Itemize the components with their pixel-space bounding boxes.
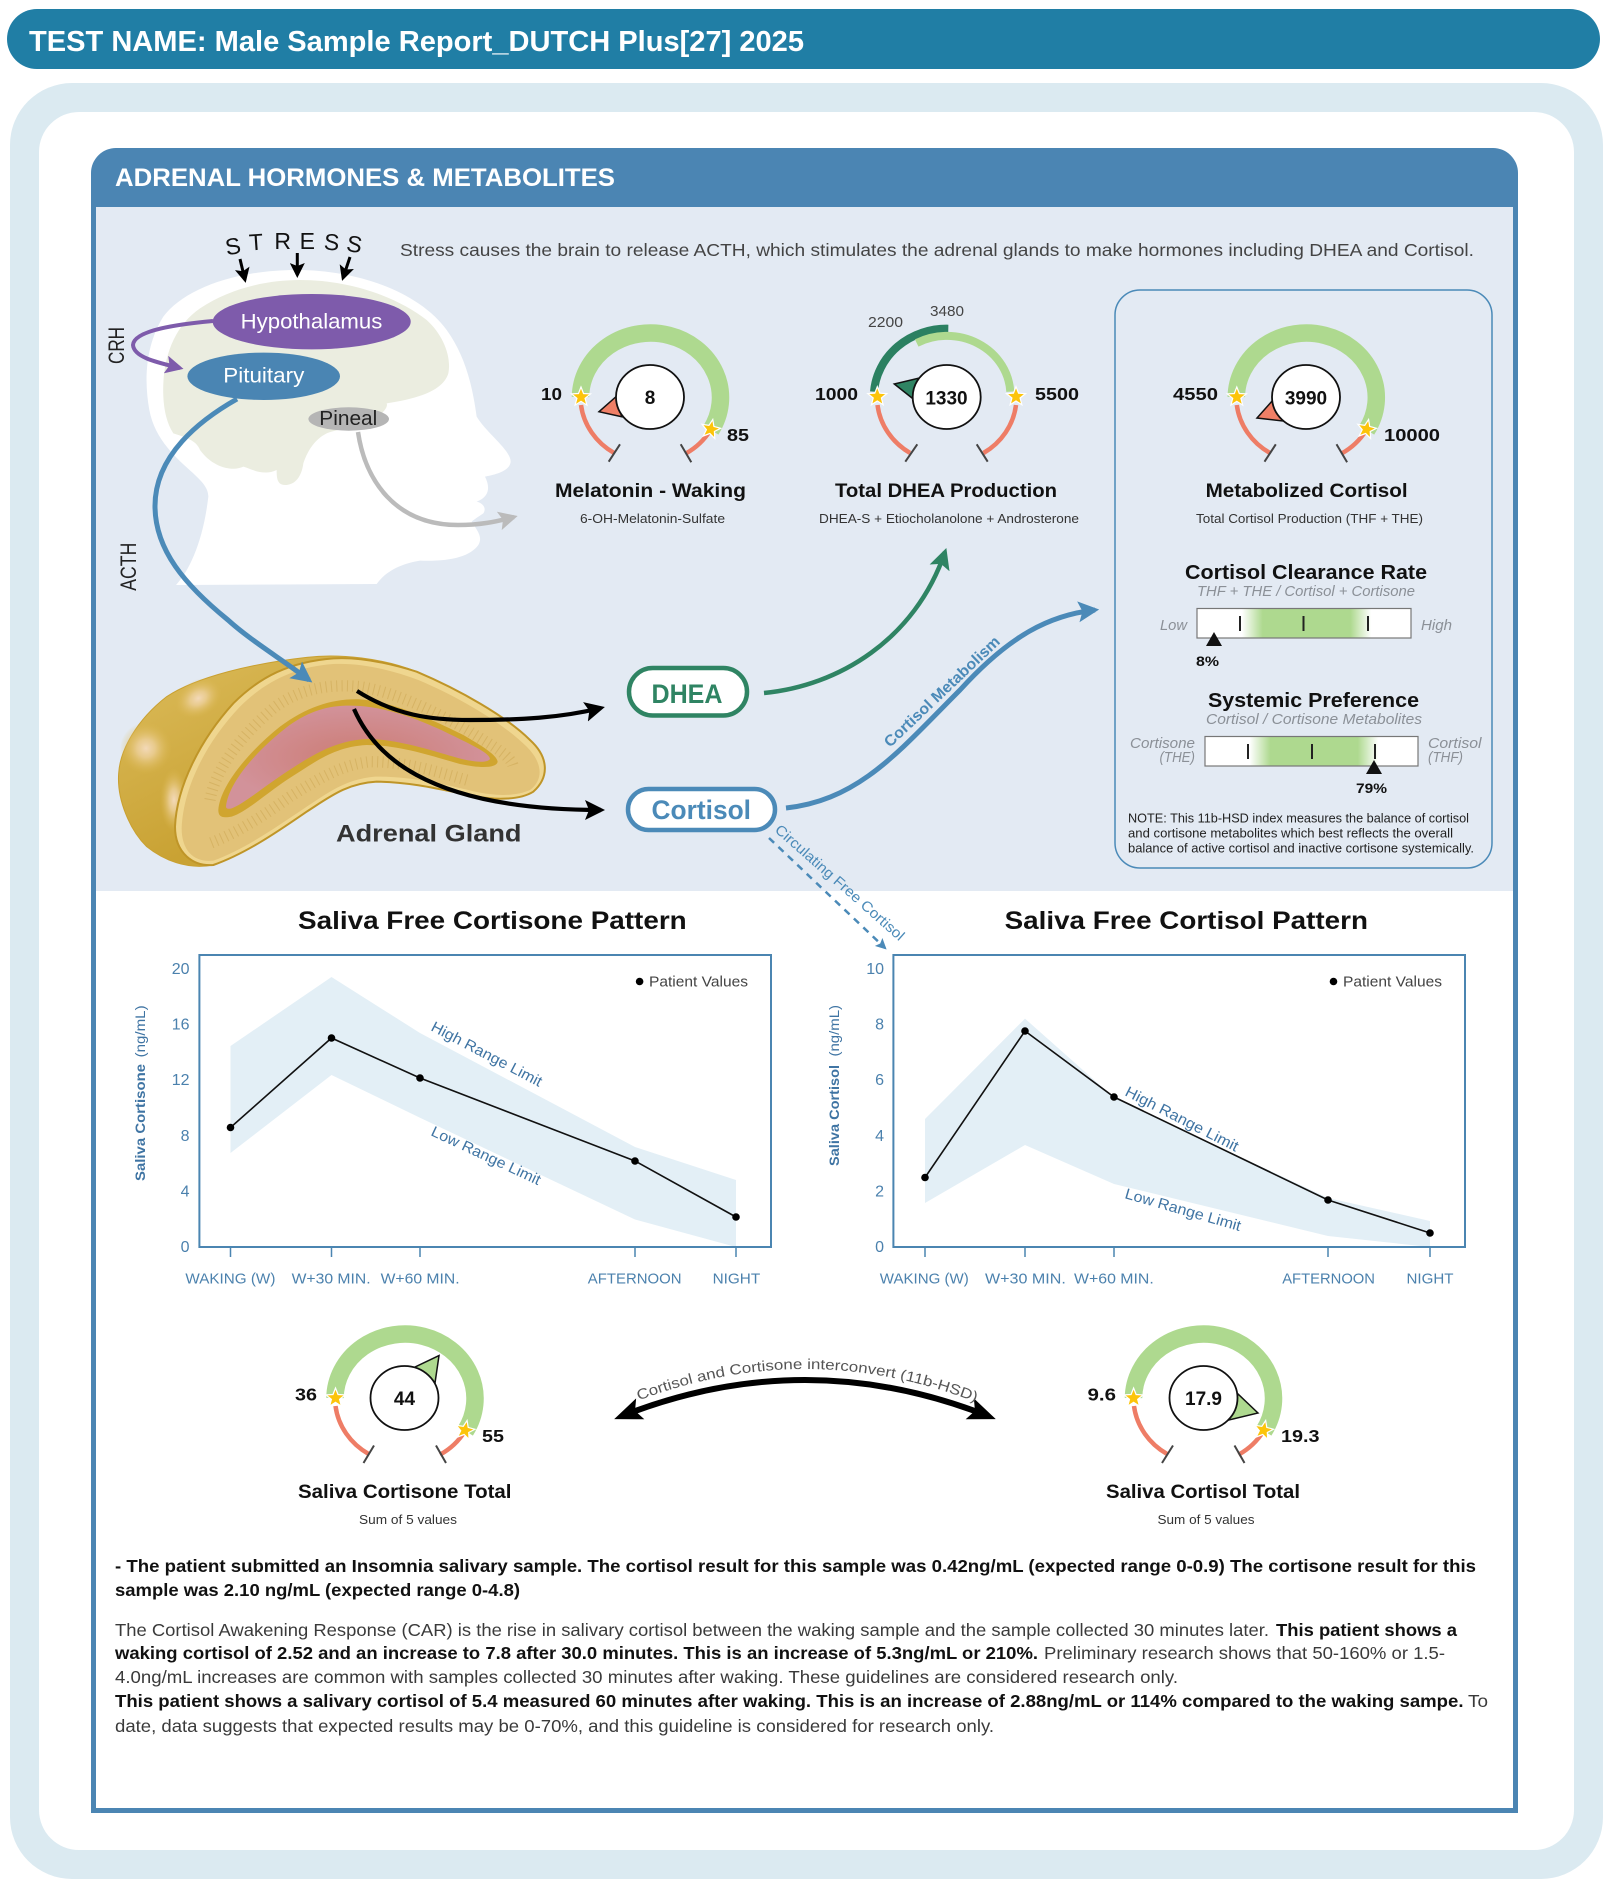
pineal: Pineal — [319, 408, 377, 430]
line chart: cortisol: 6 — [875, 1072, 884, 1089]
line chart: cortisone: W+30 MIN. — [292, 1270, 371, 1288]
gauge: melatonin: Melatonin - Waking — [555, 480, 746, 502]
gauge: metabolized cortisol: Total Cortisol Production (THF + THE) — [1196, 511, 1423, 526]
line chart: cortisol: NIGHT — [1406, 1270, 1454, 1288]
line chart: cortisone: WAKING (W) — [185, 1270, 275, 1288]
cortisol metabolism label: Cortisol Metabolism — [881, 633, 1004, 751]
interconversion label: Cortisol and Cortisone interconvert (11b-HSD) — [637, 1358, 977, 1404]
11b-HSD note: NOTE: This 11b-HSD index measures the balance of cortisol — [1128, 812, 1469, 826]
gauge: total DHEA: DHEA-S + Etiocholanolone + Androsterone — [819, 511, 1079, 526]
gauge: total DHEA: 1000 — [815, 384, 858, 404]
pituitary: Pituitary — [223, 365, 305, 388]
stress label: S — [345, 230, 364, 258]
circulating free cortisol label: Circulating Free Cortisol — [771, 822, 907, 944]
line chart: cortisone: 4 — [181, 1183, 190, 1200]
arrow: DHEA to production gauge — [764, 552, 945, 693]
cortisol pill: Cortisol — [652, 795, 751, 825]
DHEA pill — [629, 668, 747, 716]
line chart: cortisone: 12 — [172, 1072, 190, 1089]
arrow: ACTH — [155, 399, 309, 680]
cortisol awakening response text: Preliminary research shows that 50-160% or 1.5- — [1044, 1643, 1445, 1663]
line chart: cortisone: High Range Limit — [428, 1018, 546, 1091]
stress label: E — [300, 228, 315, 254]
gauge: total DHEA: 5500 — [1035, 384, 1079, 404]
gauge: melatonin: 6-OH-Melatonin-Sulfate — [580, 511, 725, 526]
cortisol clearance rate — [1160, 562, 1452, 669]
stress arrows — [240, 253, 350, 280]
line chart: cortisol: 0 — [875, 1239, 884, 1256]
section heading: ADRENAL HORMONES & METABOLITES — [115, 164, 615, 192]
CRH label: CRH — [104, 327, 129, 364]
gauge: total DHEA: 2200 — [868, 314, 903, 331]
gauge: saliva cortisol total: 17.9 — [1185, 1389, 1222, 1410]
DHEA pill: DHEA — [652, 679, 722, 709]
gauge: saliva cortisol total: Saliva Cortisol Total — [1106, 1481, 1300, 1503]
line chart: cortisol: Saliva Cortisol — [826, 1065, 842, 1166]
gauge: metabolized cortisol — [1173, 333, 1440, 526]
line chart: cortisone: AFTERNOON — [588, 1270, 682, 1288]
cortisol clearance rate: 8% — [1196, 653, 1220, 669]
line chart: cortisol: WAKING (W) — [880, 1270, 969, 1288]
arrow: adrenal to cortisol — [354, 709, 601, 810]
gauge: saliva cortisone total — [295, 1334, 512, 1527]
pituitary — [187, 353, 340, 400]
line chart: cortisol: 10 — [866, 961, 884, 978]
cortisol clearance rate: High — [1421, 618, 1452, 634]
line chart: cortisol: W+60 MIN. — [1074, 1270, 1154, 1288]
gauge: saliva cortisone total: Sum of 5 values — [359, 1512, 458, 1527]
systemic preference: Cortisone — [1130, 736, 1195, 752]
gauge: metabolized cortisol: 3990 — [1285, 388, 1327, 410]
pineal — [308, 407, 389, 431]
gauge: melatonin: 85 — [727, 425, 749, 445]
line chart: cortisone: Patient Values — [649, 974, 748, 990]
gauge: saliva cortisol total: Sum of 5 values — [1158, 1512, 1255, 1527]
stress label: S — [323, 228, 340, 256]
stress label: S — [223, 232, 243, 260]
gauge: saliva cortisol total: 19.3 — [1281, 1426, 1320, 1446]
title bar: TEST NAME: Male Sample Report_DUTCH Plus[27] 2025 — [29, 26, 804, 58]
line chart: cortisone — [132, 955, 771, 1288]
arrow: CRH — [133, 321, 213, 368]
11b-HSD note: and cortisone metabolites which best reflects the overall — [1128, 826, 1453, 840]
cortisol clearance rate: Low — [1160, 618, 1189, 634]
cortisol awakening response text: To — [1468, 1691, 1488, 1711]
cortisol awakening response text: 4.0ng/mL increases are common with samples collected 30 minutes after waking. These guidelines are considered research only. — [115, 1667, 1178, 1687]
line chart: cortisol: Patient Values — [1343, 974, 1442, 990]
gauge: saliva cortisone total: 36 — [295, 1384, 317, 1404]
line chart: cortisol: W+30 MIN. — [985, 1270, 1066, 1288]
line chart: cortisol: AFTERNOON — [1282, 1270, 1375, 1288]
insomnia sample text: - The patient submitted an Insomnia salivary sample. The cortisol result for this sample was 0.42ng/mL (expected range 0-0.9) The cortisone result for this — [115, 1556, 1476, 1576]
gauge: melatonin — [541, 333, 749, 526]
line chart: cortisol: High Range Limit — [1122, 1083, 1242, 1156]
gauge: saliva cortisone total: Saliva Cortisone Total — [298, 1481, 512, 1503]
stress label: R — [274, 228, 291, 254]
head silhouette — [147, 270, 511, 585]
gauge: metabolized cortisol: Metabolized Cortisol — [1206, 480, 1408, 502]
line chart: cortisone: 0 — [181, 1239, 190, 1256]
systemic preference: Systemic Preference — [1208, 690, 1419, 712]
brain — [163, 280, 449, 485]
line chart: cortisone: Saliva Cortisone — [132, 1064, 148, 1181]
cortisol awakening response text: This patient shows a salivary cortisol of 5.4 measured 60 minutes after waking. This is an increase of 2.88ng/mL or 114% compared to the waking sampe. — [115, 1691, 1464, 1711]
gauge: total DHEA: 3480 — [930, 303, 964, 320]
arrow: pineal to melatonin — [358, 432, 514, 525]
cortisol clearance rate: THF + THE / Cortisol + Cortisone — [1197, 584, 1415, 600]
11b-HSD note: balance of active cortisol and inactive cortisone systemically. — [1128, 842, 1474, 856]
systemic preference — [1130, 690, 1482, 796]
systemic preference: Cortisol — [1428, 736, 1482, 752]
11b-HSD note — [1128, 812, 1474, 856]
gauge: saliva cortisol total: 9.6 — [1088, 1384, 1116, 1404]
line chart: cortisol: (ng/mL) — [826, 1005, 842, 1056]
cortisol pill — [628, 789, 775, 830]
gauge: melatonin: 10 — [541, 384, 562, 404]
cortisol awakening response text: date, data suggests that expected results may be 0-70%, and this guideline is considered for research only. — [115, 1716, 994, 1736]
circulating free cortisol dashed arrow — [769, 838, 885, 948]
heading: cortisone pattern: Saliva Free Cortisone Pattern — [298, 907, 687, 935]
stress label — [223, 228, 364, 260]
adrenal gland label: Adrenal Gland — [336, 820, 522, 848]
gauge: total DHEA: Total DHEA Production — [835, 480, 1057, 502]
line chart: cortisone: 20 — [172, 961, 190, 978]
title bar — [7, 9, 1600, 69]
line chart: cortisone: W+60 MIN. — [381, 1270, 460, 1288]
cortisol clearance rate: Cortisol Clearance Rate — [1185, 562, 1427, 584]
stress label: T — [248, 229, 264, 255]
heading: cortisol pattern: Saliva Free Cortisol Pattern — [1005, 907, 1368, 935]
line chart: cortisone: (ng/mL) — [132, 1005, 148, 1057]
gauge: total DHEA: 1330 — [925, 388, 968, 410]
cortisol awakening response text: The Cortisol Awakening Response (CAR) is the rise in salivary cortisol between the waking sample and the sample collected 30 minutes later. — [115, 1620, 1269, 1640]
insomnia sample text: sample was 2.10 ng/mL (expected range 0-4.8) — [115, 1580, 520, 1600]
line chart: cortisol: 8 — [875, 1017, 884, 1034]
panel: adrenal hormones and metabolites — [91, 148, 1518, 1813]
line chart: cortisone: NIGHT — [713, 1270, 760, 1288]
line chart: cortisone: 8 — [181, 1128, 190, 1145]
systemic preference: (THE) — [1160, 750, 1195, 766]
gauge: saliva cortisone total: 55 — [482, 1426, 504, 1446]
arrow: adrenal to DHEA — [357, 691, 601, 720]
systemic preference: Cortisol / Cortisone Metabolites — [1206, 712, 1422, 728]
cortisol awakening response text: This patient shows a — [1276, 1620, 1457, 1640]
line chart: cortisone: 16 — [172, 1017, 190, 1034]
hypothalamus: Hypothalamus — [241, 310, 382, 334]
hypothalamus — [213, 294, 411, 349]
gauge: metabolized cortisol: 10000 — [1384, 425, 1440, 445]
gauge: saliva cortisone total: 44 — [394, 1389, 415, 1410]
line chart: cortisol: Low Range Limit — [1123, 1186, 1244, 1235]
ACTH label: ACTH — [116, 543, 141, 591]
cortisol awakening response text — [114, 1620, 1488, 1736]
insomnia sample text — [115, 1556, 1476, 1600]
line chart: cortisone: Low Range Limit — [428, 1123, 544, 1189]
arrow: cortisol metabolism — [786, 610, 1095, 808]
adrenal gland illustration — [118, 656, 545, 866]
systemic preference: (THF) — [1428, 750, 1463, 766]
cortisol awakening response text: waking cortisol of 2.52 and an increase to 7.8 after 30.0 minutes. This is an increase of 5.3ng/mL or 210%. — [114, 1643, 1038, 1663]
gauge: total DHEA — [815, 303, 1079, 526]
intro text: Stress causes the brain to release ACTH, which stimulates the adrenal glands to make hormones including DHEA and Cortisol. — [400, 240, 1474, 260]
arrow: interconversion — [622, 1380, 988, 1416]
line chart: cortisol: 2 — [875, 1183, 884, 1200]
line chart: cortisol — [826, 955, 1465, 1288]
gauge: melatonin: 8 — [645, 388, 655, 409]
gauge: saliva cortisol total — [1088, 1334, 1320, 1527]
line chart: cortisol: 4 — [875, 1128, 884, 1145]
panel: cortisol metabolism box — [1115, 290, 1492, 868]
gauge: metabolized cortisol: 4550 — [1173, 384, 1218, 404]
systemic preference: 79% — [1356, 780, 1388, 796]
